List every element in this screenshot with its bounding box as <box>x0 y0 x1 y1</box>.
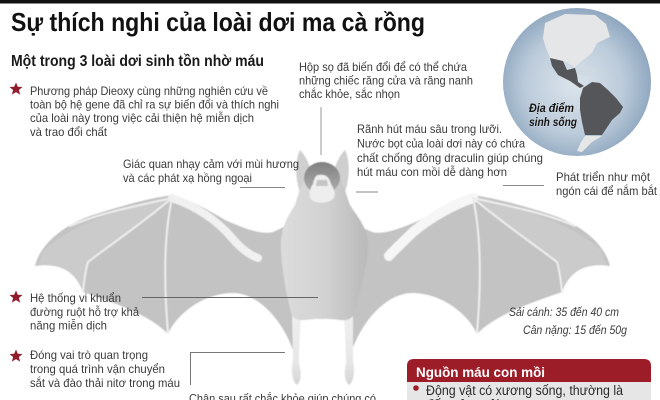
top black bar <box>0 0 660 4</box>
panel text: Động vật có xương sống, thường là <box>426 383 623 398</box>
stats: wingspan and weight <box>509 307 628 337</box>
globe label: sinh sống <box>529 115 578 129</box>
subtitle: Một trong 3 loài dơi sinh tồn nhờ máu <box>11 53 264 70</box>
callout: tongue groove: Rãnh hút máu sâu trong lưỡi. <box>357 122 502 136</box>
bat illustration <box>35 150 610 385</box>
callout: senses: Giác quan nhạy cảm với mùi hương <box>123 157 299 171</box>
globe map: habitat <box>503 8 651 156</box>
callout: senses <box>123 157 299 188</box>
legs and feet <box>292 312 354 385</box>
text block: iron transport <box>30 348 180 390</box>
left wing <box>35 195 300 350</box>
panel: blood sources <box>407 359 651 400</box>
text block: genome research <box>30 84 279 139</box>
callout: tongue groove <box>356 122 544 192</box>
ears <box>296 150 349 192</box>
callout: tongue groove: hút máu con mồi dễ dàng hơn <box>357 165 507 179</box>
callout: tongue groove: Nước bọt của loài dơi này có chứa <box>357 136 525 150</box>
callout: skull: những chiếc răng cửa và răng nanh <box>299 74 473 88</box>
callout: tongue groove: chất chống đông draculin giúp chúng <box>357 151 543 165</box>
text block: genome research: Phương pháp Dieoxy cùng những nghiên cứu về <box>30 84 268 98</box>
southern tip pale land <box>577 136 602 152</box>
callout: senses: và các phát xạ hồng ngoại <box>123 171 252 185</box>
globe label: Địa điểm <box>529 101 574 115</box>
text block: iron transport: sắt và đào thải nitơ trong máu <box>30 376 180 390</box>
callout: thumb <box>556 170 658 198</box>
Central America dark land <box>550 58 584 88</box>
callout: skull: Hộp sọ đã biến đổi để có thể chứa <box>299 60 467 74</box>
text block: iron transport: Đóng vai trò quan trọng <box>30 348 148 362</box>
star bullet: iron <box>10 350 22 362</box>
bullet <box>413 385 419 391</box>
callout: thumb: Phát triển như một <box>556 170 651 184</box>
stats: wingspan and weight: Cân nặng: 15 đến 50g <box>523 325 628 337</box>
text block: genome research: và trao đổi chất <box>30 125 108 139</box>
panel heading: Nguồn máu con mồi <box>416 364 545 380</box>
text block: gut bacteria: năng miễn dịch <box>30 318 107 332</box>
panel header <box>407 359 651 382</box>
callout: thumb: ngón cái để nắm bắt <box>556 184 658 198</box>
callout: skull <box>299 60 473 155</box>
text block: gut bacteria <box>30 291 139 332</box>
leader line: gut <box>142 296 318 298</box>
title: Sự thích nghi của loài dơi ma cà rồng <box>11 7 425 37</box>
star bullet: method <box>10 82 22 95</box>
text block: iron transport: trong quá trình vận chuyển <box>30 362 165 376</box>
text block: gut bacteria: đường ruột hỗ trợ khả <box>30 305 139 319</box>
North America land <box>543 14 610 67</box>
text block: gut bacteria: Hệ thống vi khuẩn <box>30 291 121 305</box>
star bullet: gut <box>10 290 22 303</box>
Caribbean islands <box>572 66 598 76</box>
stats: wingspan and weight: Sải cánh: 35 đến 40 cm <box>509 307 619 319</box>
text block: genome research: toàn bộ hệ gene đã chỉ ra sự biến đổi và thích nghi <box>30 98 279 112</box>
body <box>281 165 368 320</box>
muzzle <box>310 175 335 203</box>
callout: skull: chắc khỏe, sắc nhọn <box>299 87 400 101</box>
South America dark land <box>580 82 623 135</box>
text block: genome research: của loài này trong việc cải thiện hệ miễn dịch <box>30 111 254 125</box>
globe label <box>529 101 578 129</box>
leader bracket: hind legs <box>190 352 285 385</box>
right wing <box>345 195 610 350</box>
head <box>304 162 340 194</box>
